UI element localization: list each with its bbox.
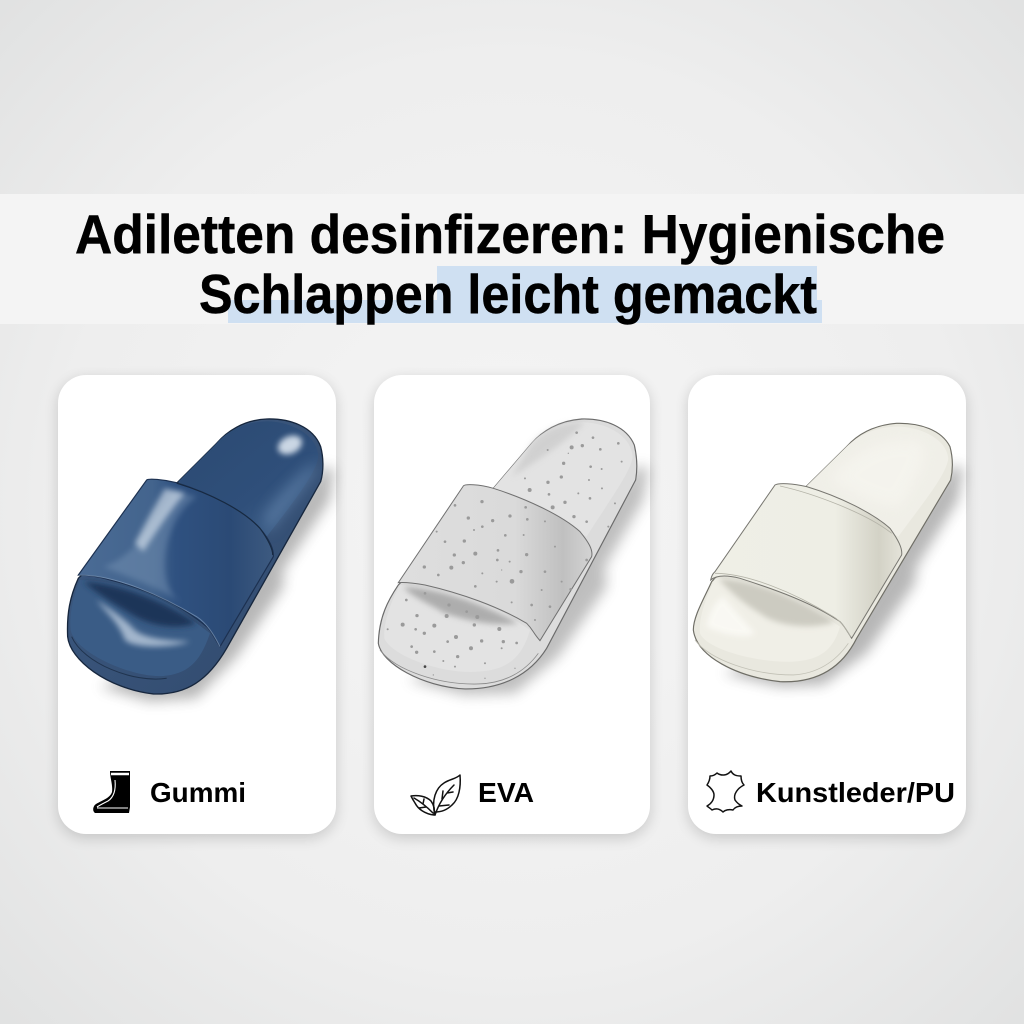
card: Kunstleder/PU <box>688 375 966 834</box>
illustration: grey speckled EVA slide <box>378 419 648 695</box>
title <box>75 203 945 325</box>
card: Gummi <box>58 375 336 834</box>
illustration: blue rubber slide <box>67 419 334 702</box>
title highlight <box>228 266 822 323</box>
illustration: cream synthetic leather slide <box>693 423 963 687</box>
icon: leaves <box>411 775 460 815</box>
title: Adiletten desinfizeren: Hygienische <box>75 203 945 265</box>
panel: EVA <box>374 375 650 838</box>
card: EVA <box>374 375 650 834</box>
label: EVA: EVA <box>478 777 534 808</box>
title: Schlappen leicht gemackt <box>199 263 817 325</box>
label: Gummi: Gummi <box>150 777 246 808</box>
panel: Gummi <box>58 375 336 838</box>
panel: Kunstleder/PU <box>688 375 966 838</box>
label: Kunstleder/PU: Kunstleder/PU <box>756 777 955 808</box>
title band <box>0 194 1024 324</box>
icon: leather hide <box>707 771 744 812</box>
icon: rubber boot <box>93 771 130 813</box>
